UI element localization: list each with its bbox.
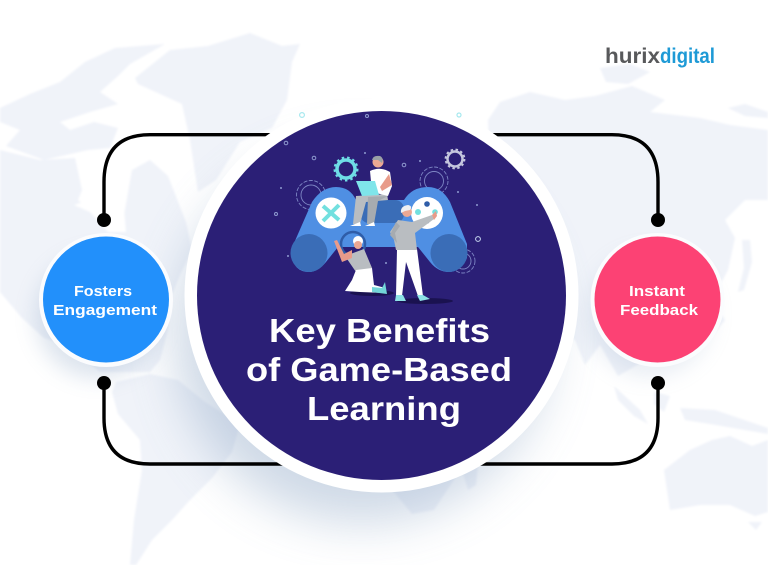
connector dot: bottom right bbox=[651, 376, 665, 390]
kneeling person bbox=[334, 232, 394, 296]
logo: hurix digital: digital bbox=[660, 45, 715, 68]
connector: bottom right bbox=[470, 383, 658, 464]
controller grips bbox=[290, 234, 328, 272]
node: Instant Feedback: Feedback bbox=[620, 302, 699, 319]
map: islands near logo bbox=[600, 64, 650, 84]
central circle bbox=[184, 98, 578, 492]
outline gear: left bbox=[296, 180, 326, 210]
white gear bbox=[446, 150, 464, 168]
map: Japan bbox=[738, 240, 752, 292]
drop shadow: right circle bbox=[588, 252, 712, 376]
ring accent dots bbox=[300, 113, 461, 117]
title: Key Benefits bbox=[269, 312, 490, 349]
connector: top left bbox=[104, 135, 290, 220]
node: Fosters Engagement: Engagement bbox=[53, 302, 157, 319]
map: Madagascar bbox=[462, 464, 478, 490]
connector dot: bottom left bbox=[97, 376, 111, 390]
title: Learning bbox=[307, 390, 461, 427]
sitting person bbox=[350, 156, 392, 226]
connector dot: top right bbox=[651, 213, 665, 227]
title bbox=[246, 312, 512, 427]
map: Northern Siberian islands bbox=[728, 104, 768, 118]
connector: top right bbox=[480, 135, 658, 220]
map: Southeast Asian islands bbox=[614, 386, 768, 434]
right button with dots bbox=[411, 197, 443, 229]
map: Australia bbox=[664, 436, 768, 516]
node: Fosters Engagement bbox=[39, 233, 173, 367]
node: Instant Feedback bbox=[590, 233, 724, 367]
title: of Game-Based bbox=[246, 351, 512, 388]
map: North and Central America bbox=[0, 150, 192, 372]
connector: bottom left bbox=[104, 383, 300, 464]
illustration: game controller with players bbox=[274, 114, 480, 304]
map: Hudson Bay gap bbox=[74, 172, 130, 232]
outline gear: right top bbox=[420, 167, 448, 195]
logo: hurix digital bbox=[605, 45, 715, 68]
drop shadow: central circle bbox=[174, 147, 550, 523]
node: Instant Feedback: Instant bbox=[629, 283, 685, 300]
scattered dots bbox=[274, 114, 480, 241]
outline gear: right bottom bbox=[451, 249, 475, 273]
map: Eurasia bbox=[488, 86, 768, 376]
node: Fosters Engagement: Fosters bbox=[74, 283, 132, 300]
map: Arctic islands bbox=[0, 44, 165, 160]
logo: hurix digital: hurix bbox=[605, 45, 660, 68]
standing person bbox=[390, 205, 453, 304]
cyan gear bbox=[334, 158, 358, 180]
map: Greenland bbox=[135, 33, 300, 192]
controller body bbox=[291, 187, 467, 272]
drop shadow: left circle bbox=[36, 254, 160, 378]
controller centre panel bbox=[360, 200, 404, 223]
map: Europe and Africa under central circle bbox=[300, 140, 520, 514]
map: Tasmania bbox=[748, 522, 762, 530]
map: South America bbox=[112, 374, 240, 565]
connector dot: top left bbox=[97, 213, 111, 227]
left button with cross bbox=[316, 198, 346, 228]
